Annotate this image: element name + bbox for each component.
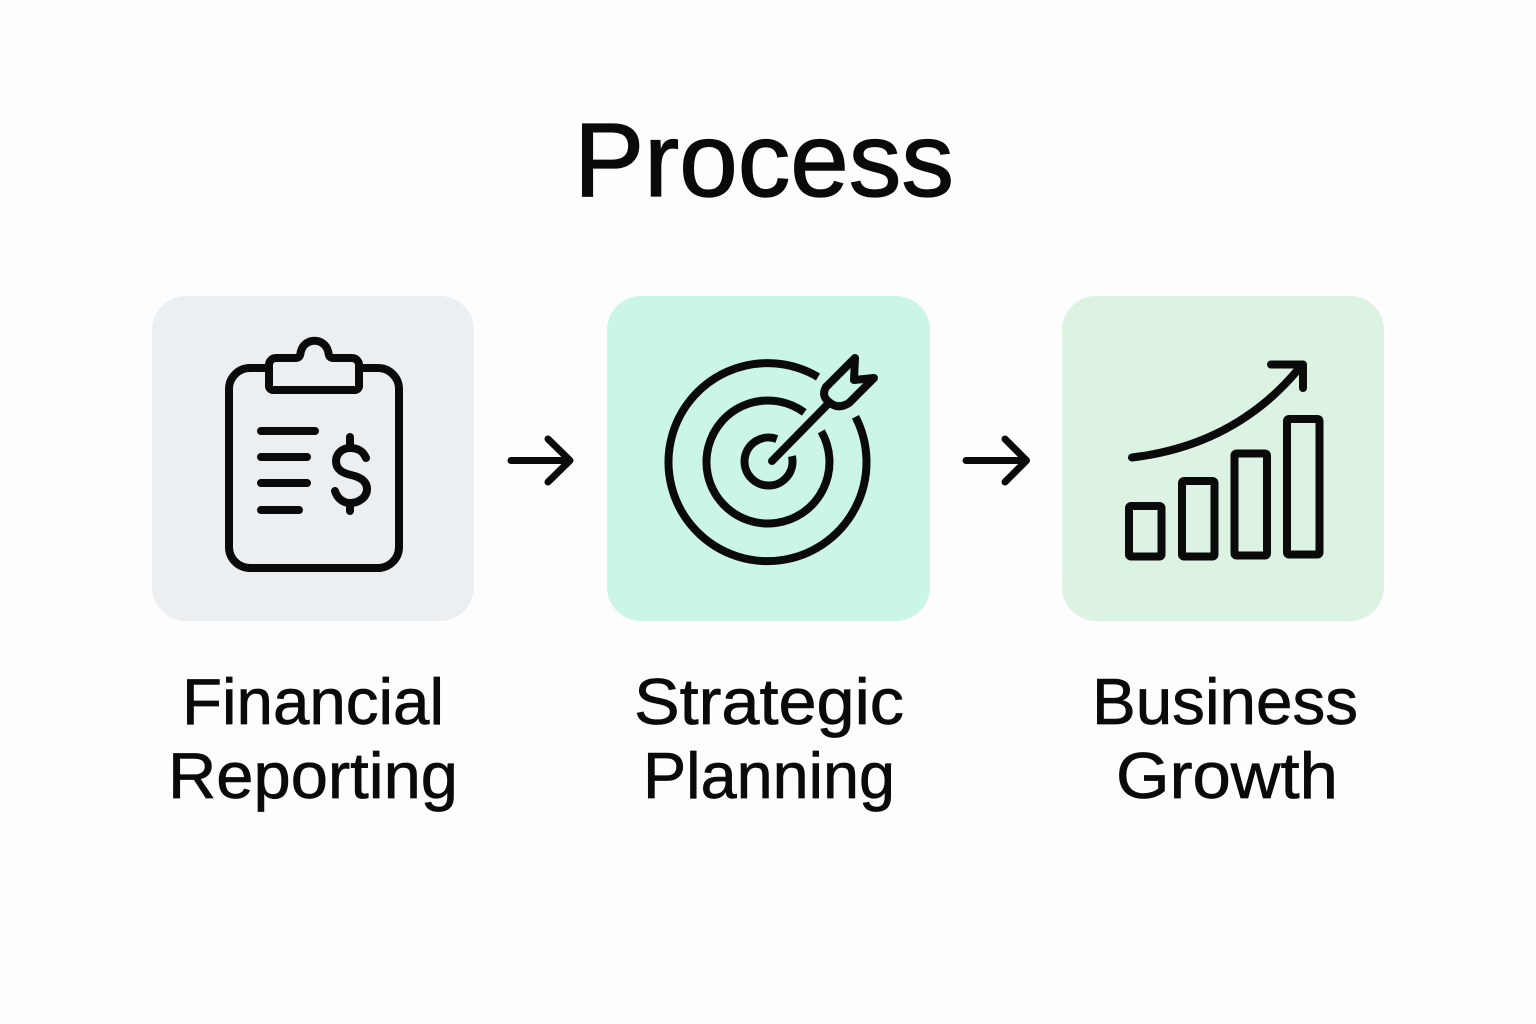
label: strategic planning: Strategic [634,665,904,738]
icon: bar chart with rising arrow [1129,364,1320,556]
arrow: step 1 to 2 [511,439,570,482]
panel: strategic planning [607,296,930,621]
icon: target with arrow [668,358,874,561]
label: financial reporting: Reporting [168,739,458,812]
panel: business growth [1062,296,1384,621]
panel: financial reporting [152,296,474,621]
label: strategic planning [634,665,904,812]
icon: clipboard with dollar [229,341,399,568]
label: business growth [1092,665,1358,812]
label: strategic planning: Planning [643,739,895,812]
label: financial reporting [168,665,458,812]
label: business growth: Growth [1116,739,1338,812]
title: Process [574,102,954,219]
label: business growth: Business [1092,665,1358,738]
label: financial reporting: Financial [182,665,444,738]
arrow: step 2 to 3 [966,439,1026,482]
